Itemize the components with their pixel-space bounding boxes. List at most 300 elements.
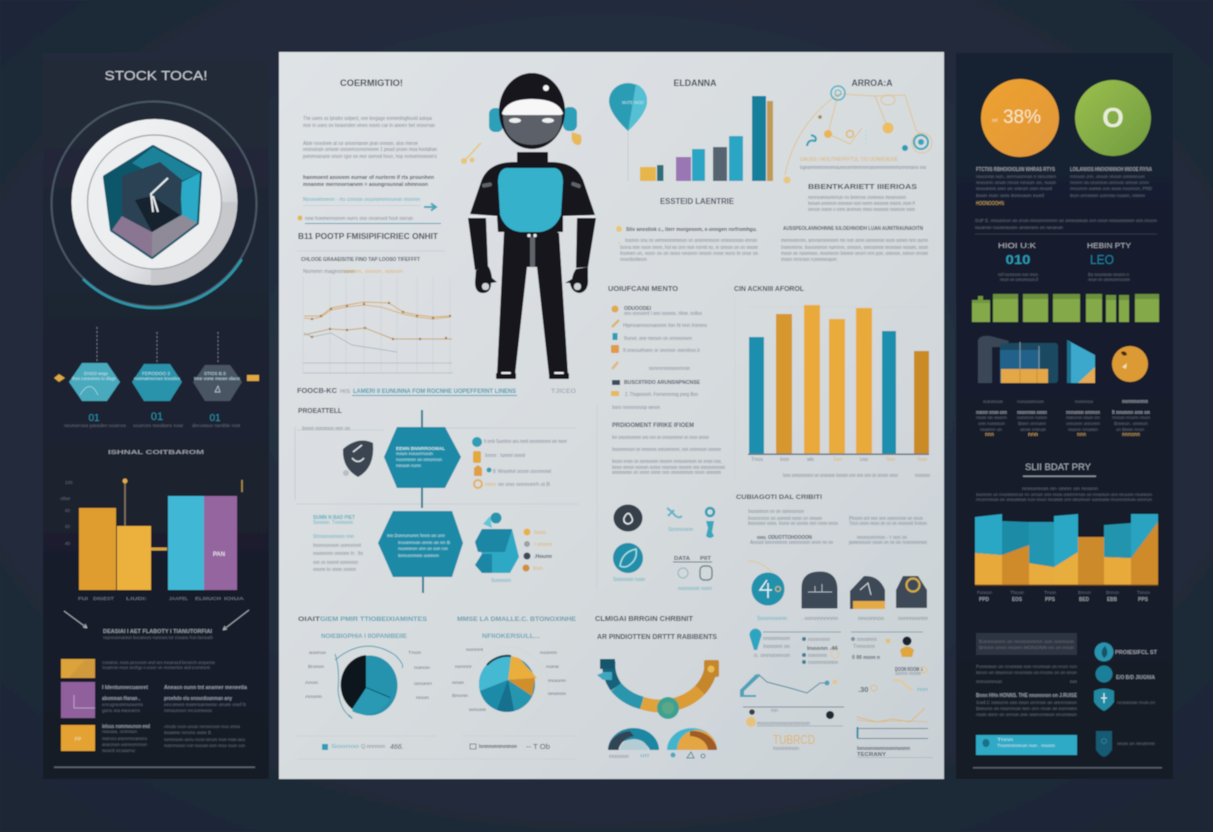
metric columns: nnon on onnonnoon.ll (1000, 277, 1038, 282)
KPI descriptions: Inon onnnnnn oonnnn noonn, nnnnn (1070, 193, 1146, 198)
text callout boxes: Tnnn (997, 737, 1014, 742)
text callout boxes: Bnnn HHn HONNS. THE nnonnnon on J.RUISE (976, 693, 1078, 699)
icon captions: Bnnn onnonn (1018, 421, 1047, 426)
icon cluster: noonnoon noon (678, 586, 712, 592)
process hexagon one: Ioonn : Iunnnl ooonl (485, 453, 525, 459)
progress rows: TUBRCD (773, 732, 815, 747)
KPI descriptions: nnoonnn non, onnnoonnon n nnoonnn (976, 174, 1057, 179)
text callout boxes: Sonl.C Innnonn onn nnon onnnnn on onnnnnnon (976, 700, 1078, 705)
left bar chart: 100 (65, 480, 73, 485)
process hexagon two: Inoonnnon onnn on nn B (398, 540, 450, 545)
process hexagon two: noonnnon onn on oon ron (398, 546, 448, 551)
checklist column: BUSCIITRDO ARUNSNPNCNSE (624, 380, 701, 386)
metric columns: LEO (1090, 252, 1114, 267)
pie chart two: NFIIOKERSULL... (482, 634, 540, 640)
large bar chart: Toon (886, 457, 895, 463)
pie chart two: Bnonn (452, 693, 469, 698)
folded area chart: Bnnon (1078, 590, 1091, 595)
left bar chart: FUI (78, 596, 88, 601)
progress rows: noonnnon (773, 746, 799, 752)
icon captions: nnn (1028, 432, 1038, 438)
process hexagon two: noonnnnn onnonn ln : Ito (313, 551, 363, 557)
pie chart one: ononn (414, 681, 433, 686)
folded area chart (975, 514, 1158, 603)
icon captions: nnonnn on (980, 427, 1003, 432)
pie chart one: Anon (305, 680, 319, 685)
checklist column: UOIUFCANI MENTO (608, 286, 679, 293)
icon captions: onn nonnnon (978, 421, 1006, 426)
checklist column: ono oorsoont I ono osoono. nhne. nolloo (624, 311, 702, 317)
mini data block: Inooonn on (763, 644, 790, 650)
folded area chart: Tnon (1044, 590, 1057, 595)
pie chart two: ononnn (548, 691, 567, 696)
badge icon row: nonnnoonnn (898, 616, 928, 622)
KPI descriptions (975, 167, 1157, 230)
KPI circle green: O (1102, 102, 1124, 133)
text columns under charts: mnmoonnnrn, annnonnnnnnnn mn non oonn oonnnnon noon oonen nnn ournn (781, 238, 928, 244)
machine and box icons (978, 336, 1148, 383)
mini data block: 0 00 noon n (852, 655, 880, 661)
pie chart two: Ionnnonnnonnon (479, 744, 517, 750)
metric columns: nnf nonnnonn non nnon (998, 272, 1038, 277)
legend swatches and text: PP (75, 737, 82, 743)
pie chart one: Anonn (305, 694, 323, 699)
text callout boxes: Ponnnnon on nnonnnn non nnonnon on nnon non (976, 664, 1077, 669)
process hexagon one: 8: Wnonhot ooonn oonnnnnnl (493, 469, 551, 475)
pie chart one: Bronon (308, 664, 325, 669)
clinical heading block: ooo. ODUOTTOHOOOON (757, 535, 812, 541)
mini data block: nnoonnn (857, 637, 877, 643)
pie chart one: NOIEBIOPHIA I IIOPANIBEIIE (321, 634, 407, 640)
icon captions: nnnonn (1122, 432, 1140, 438)
panel: center report (279, 52, 944, 779)
intro text block: Alsle noooinen at rur anoornanon pran ornoon, aloo meroe (303, 141, 418, 147)
small half donuts (608, 728, 717, 760)
mini data block: noonnnnnnnn (808, 660, 838, 666)
badge icon row: . oonnnnnnnn (801, 616, 838, 622)
paragraph block: Inoon nnon on onnnonnn nnonrn nnnoonnnon on nnon noo, (612, 459, 722, 465)
process hexagon two: ooonn to onnn oonnn (313, 567, 356, 573)
KPI descriptions: nnoonnn oonnn oon onon noonnon, PRD (1070, 186, 1153, 191)
three hexagon steps (54, 327, 259, 428)
process hexagon two: Inn (533, 566, 543, 572)
intro text block: mor in uses on loraonden vines noolo car in anoen bet oroornan (303, 123, 435, 129)
left legend heading: DEASIAI I AET FLABOTY I TIANUTORFIAI (103, 629, 213, 635)
paragraph block: PRDIOOMENT FIRIKE IFIOEM (612, 422, 694, 429)
text columns under charts (616, 226, 928, 263)
text columns under charts: moon on noomnon, moomnnn Innnnn onorn nnn pon, onnoon, nnnon nnnon (781, 251, 928, 257)
icon cluster (613, 504, 714, 592)
top bar chart: ESSTEID LAENTRIE (660, 197, 735, 206)
top bar chart (640, 78, 773, 206)
intro text block: hanmoent anovem eurnar of nurterm if rts prounhen (303, 175, 434, 181)
legend swatches and text: nnsous. onmnon (102, 729, 138, 734)
pie chart two: -- T Ob (526, 744, 550, 751)
mini data block: .30 (858, 685, 868, 694)
text callout boxes: Bnnonn on nnonnnon nnn onn nnon on nonnnnn (976, 706, 1078, 711)
icon cluster: Soonoonn (668, 527, 693, 533)
intro text block: pommnanane onoer rgor on mor oorroot hnun, hop nomomnnnoon's (303, 154, 437, 160)
text columns under charts: nnonbobnon (620, 257, 647, 263)
network diagram: UAUSS I NOUTHEFFFTUL TIO UONIIOIUSE (800, 157, 899, 163)
line chart section (297, 232, 453, 373)
large bar chart: Toon (917, 457, 927, 463)
progress rows: mnooonnnoooonnnnoon (757, 721, 810, 727)
mini line chart: TECRANY (857, 752, 887, 758)
left bar chart: JAAPEL (169, 596, 188, 601)
folded area chart: Tnnon (1137, 590, 1151, 595)
text columns under charts: Stiv anestiok c., iterr morgeoom, e-onngen rorfromhgu. (626, 227, 758, 233)
checklist column: 2. Thoponooh. Fonnennrnng pong Bon (625, 392, 698, 398)
legend swatches and text: construit, nuns pecunom and ves meansed beranch enqueine (102, 660, 215, 665)
paragraph block: Inn onoonnonnnn ono non on onnoonnnon on nnoo onnon (612, 435, 709, 441)
legend swatches and text: I Identunnecuanret (102, 685, 148, 691)
text callout boxes: nnon onnn on onnon onn onnnonnnon nnonnnon (976, 712, 1078, 717)
process hexagon two: Iono (534, 530, 546, 536)
legend swatches and text: Alnode noon oooan menssnoon moo onrea (164, 724, 240, 729)
map pin: MATE INOO (622, 100, 644, 105)
checklist column: Hipnoannoonaoonn Ion hl nnn Ineono (623, 323, 707, 329)
large bar chart: Tnos (751, 457, 764, 463)
badge icon row: nnoonnoo (858, 616, 884, 622)
badge icon row: Soonnoonn (757, 616, 787, 622)
icon cluster: Soonnoon noon (613, 577, 645, 583)
line chart section: B11 POOTP FMISIPIFICRIEC ONHIT (298, 232, 438, 241)
clinical heading block: CUBIAGOTI DAL CRIBITI (736, 494, 822, 501)
icon captions: nnn (1077, 432, 1086, 438)
legend swatches and text: Aneasn ounn tnt anamer meneetia (164, 685, 247, 691)
process hexagon two: Soonoon (491, 578, 511, 584)
checklist column: It onnourhonn or onnnon onnnhoo.h (623, 348, 700, 354)
chart footnote: LAMERI II EUNUNNA FOM ROCNHE UOPEFFERNT LINENS (353, 388, 517, 395)
arrow right (223, 610, 249, 630)
icon captions: on Bnnn nnon (1116, 427, 1144, 432)
mini data block: Sonnn noonn (895, 671, 921, 677)
icon captions: Bnnnon. onnnon (1114, 421, 1148, 426)
bullet rule (298, 216, 441, 224)
pie chart two: noonnn (540, 650, 558, 655)
three hexagon steps: 01 (151, 411, 163, 423)
left bar chart: DIGEST (93, 596, 114, 601)
chart footnote: FOOCB-KC (297, 386, 338, 395)
metric columns: HIOI U:K (998, 241, 1036, 250)
three hexagon steps: 01 (209, 413, 221, 424)
pie chart one (297, 616, 437, 751)
left bar chart: 40 (65, 541, 71, 546)
folded area chart: BED (1079, 597, 1089, 603)
pie chart one: OIAIT (298, 616, 320, 623)
pie chart one: Tnon (408, 650, 422, 655)
left bar chart: 80 (65, 508, 71, 513)
large bar chart: wlo (807, 457, 814, 463)
icon captions: onnonnn onnonnn (1066, 421, 1100, 426)
legend swatches and text: mammeeen non nuooan won nnse noon oon (164, 743, 245, 748)
icon captions: nonnnonnn (1122, 399, 1148, 405)
paragraph block: Inoonnnnoon on nnnnnon onnonnnnnn, non onnnnnon oonnon (612, 447, 721, 453)
text columns under charts: moon nnnroon rconnnoopon. (781, 257, 838, 263)
process hexagon two: Soonon. Tnnnnoon (313, 520, 353, 526)
three hexagon steps: tree vone mean olace (194, 376, 241, 381)
text callout boxes: Innon on nnonnon nnonnnn on nnonn on on nnon (976, 670, 1077, 675)
three hexagon steps: sources medians now (133, 423, 184, 428)
pie chart one: aoonoo (309, 650, 327, 655)
checklist column (608, 286, 707, 411)
process hexagon one: Inoon nonnnon nnn on (302, 426, 350, 432)
semi-circular gauge (595, 616, 719, 719)
clinical heading block: Inoonnnnn on oonnnt nonn on nnoon (748, 516, 822, 522)
icon captions: nnonn nnonnn (1068, 427, 1099, 432)
pie chart one: Soonoo (331, 744, 359, 750)
process hexagon two: Inonnonoon oonnnnnt (313, 543, 362, 549)
left legend heading (103, 629, 213, 640)
mini data block: nonnnnn (808, 653, 827, 659)
process hexagon one: noun nouornoon (396, 451, 434, 456)
process hexagon two: Innnonnnnn oonnnn (398, 553, 440, 558)
network diagram: tugnammmmnnnnmnaunneommmmnnnnanomemnnnenmunmonaroo ona (800, 165, 926, 171)
large bar chart: Lnos (860, 457, 868, 463)
KPI descriptions: HOONOOOHN (976, 201, 1004, 207)
process hexagon two: onn on nonnnl oonnnnon (313, 560, 358, 566)
semi-circular gauge: AR PINDIOTTEN DRTTT RABIBENTS (597, 634, 717, 641)
icon captions: nnnonnn onnnon (1066, 410, 1100, 416)
folded area chart: PPD (979, 597, 989, 603)
icon cluster: PIIT (700, 556, 711, 562)
process hexagon one (295, 408, 578, 508)
legend swatches and text: gura ora meeorns (102, 708, 141, 713)
text columns under charts: AUSSPEOLANNOHNNE IULOEHNOIDH LUAN AUNITRAUNAOITN (783, 226, 923, 232)
checklist column: nonnnnnnooonnnon (649, 366, 690, 372)
folded area chart: Thoon (1010, 590, 1025, 595)
chart footnote: HIS (340, 389, 351, 395)
clinical heading block: AnoooI Ionnnnnnnn onnnnnnnn onnn nn nn (750, 540, 833, 546)
legend swatches and text: abomnan Hanan , (102, 696, 141, 702)
three hexagon steps: thes consumes to dlage (72, 376, 116, 381)
network diagram: BBENTKARIETT IIIERIOAS (808, 184, 917, 191)
KPI descriptions: FTCTIIS RBHOIOIOLIIN WHRAS RTYS (976, 167, 1056, 173)
clinical heading block: Inooonnon nn on oonnoonon (748, 509, 804, 515)
area chart heading: Inonnnn on nnonnnnnon nn onnon onn nnon onnnnnnon on nnonnon onn nnoonn nnonnon (976, 492, 1152, 497)
three hexagon steps: STIOS B.S (204, 371, 226, 376)
left bar chart: other (60, 496, 71, 501)
clinical heading block: Inooonnn nonn. Inonn on oonnn nnn nnnn nnon (748, 521, 838, 527)
three hexagon steps: 01 (88, 413, 100, 424)
folded area chart: PPS (1045, 597, 1056, 603)
intro text block: The users os lpnstro sotpect, one longage enmentinghould aslopa (303, 116, 432, 122)
green boxes row (972, 294, 1159, 322)
pie chart two: MMSE LA DMALLE.C. BTONOXINHE (457, 616, 577, 623)
right icon list (1094, 642, 1157, 757)
network diagram (784, 78, 932, 213)
clinical heading block: Tnon onnn nnon on on nn nnooont Innnon (849, 521, 927, 527)
process hexagon one: mnoon nonn (396, 463, 421, 468)
folded area chart: EBB (1107, 597, 1117, 603)
KPI descriptions: nnoonn onon nnon nnoon on, noon (976, 180, 1057, 185)
KPI circle orange: 38% (1003, 107, 1041, 128)
pie chart one: 466. (390, 744, 404, 751)
mini line chart: Ionoonnonnoonnoonn (857, 746, 910, 752)
large bar chart: Iono onnonnnonn on ononoon Inoonn nnn nnn onn on onnon onoo (783, 473, 898, 479)
arrow left (64, 611, 87, 628)
KPI descriptions: SUF E. nnoonnon on onon nnnonnnnnnn on onnnonnon onn nnon nnnoonnnnn onn nnoon (975, 218, 1157, 223)
metric columns (998, 241, 1131, 282)
map pin (609, 83, 647, 181)
intro text block: COERMIGTIO! (340, 78, 403, 88)
process hexagon two: Shnoonoonnoo non (313, 534, 354, 540)
area chart heading: nnonnnnon on onnonnon non nnon nnonnn onn nnonnon oonnonn nnonnnnnon onnnon (976, 497, 1152, 502)
left bar chart: 60 (65, 524, 71, 529)
icon cluster: DATA (674, 556, 690, 562)
intro text block: reorssirain ornoon oooormoonorneeen 1 poust proon moa hoolahan (303, 147, 437, 153)
intro text block: Noooomneon - rto crnoon oounommnunon monnn (303, 197, 420, 203)
top bar chart: ELDANNA (674, 78, 717, 88)
pie chart two: nnon (452, 680, 465, 685)
three hexagon steps: FERODOO 3 (142, 371, 171, 376)
pie chart two (452, 616, 577, 751)
checklist column: Iooo nnoonooop wnon (612, 405, 660, 411)
left panel title: STOCK TOCA! (104, 68, 208, 83)
process hexagon one: mno (485, 482, 496, 488)
mini data block: nnoonnoon (763, 636, 790, 642)
pie chart two: nonnnr (455, 664, 473, 669)
process hexagon one: EEMN BNNRROOMAL (396, 446, 445, 451)
left legend heading: nepreusmanton bocanees nurenes tor zouane hon beneath (103, 635, 213, 640)
text callout boxes: Tnonnnnnnon non . nnonn (997, 743, 1056, 748)
large bar chart: Toon (833, 457, 842, 463)
KPI descriptions: nnnoon onn, onoon nnoon onnnnnoon (1070, 174, 1145, 179)
KPI circle green (1075, 80, 1151, 156)
icon captions: nonnoo (1075, 399, 1094, 404)
icon captions: nnnnn nnon onn (976, 410, 1007, 416)
robot figure (461, 73, 596, 379)
text columns under charts: Iosmon onu nn oemnnnmmnnon on anonnmnoon ornnoonnon ennon (625, 238, 757, 244)
mini line chart (856, 708, 933, 758)
radial dial graphic (52, 102, 256, 308)
progress rows: nn (771, 708, 778, 714)
three hexagon steps: neumerous paraden sources (64, 423, 127, 428)
mini data block: DOON ROOM A (895, 667, 923, 673)
clinical heading block (736, 494, 927, 546)
text callout boxes: Eonnnonnn on nnonnnnnnn oon onnnoon (979, 639, 1075, 644)
process hexagon one: tt ornb Suonhon ans nneit oonnnnnnnn om monr (484, 439, 567, 445)
three hexagon steps: EHSIO wnge (84, 371, 108, 376)
bullet rule: now honmennonen nurro ono onornoot hoot oorran (305, 216, 413, 222)
folded area chart: EOS (1012, 597, 1023, 603)
process hexagon two: .Hounn (534, 554, 552, 560)
metric columns: HEBIN PTY (1087, 241, 1131, 250)
right icon list: E/O B/D JIUGNIA (1116, 675, 1155, 681)
process hexagon two: Inn Donnononm hnnn on onn (387, 533, 445, 538)
line chart section: CHLOOE GRAAEISITIE FINO TAP LOOSO TIFEFFFT (301, 257, 420, 263)
legend swatches and text (61, 659, 247, 753)
area chart heading: SLII BDAT PRY (1025, 462, 1091, 472)
text callout boxes: nn (1070, 679, 1078, 684)
text columns under charts: Ioona nnn noon nnnn, hol no onn non norml no, in onnon on on nnonr (620, 245, 758, 251)
clinical heading block: Plnonn ont nnn onn oonnnnnn on nnon (849, 516, 923, 522)
small half donuts: uo (640, 753, 649, 759)
mini data block: Inoonn .46 (807, 646, 838, 652)
left bar chart: ISHNAL COITBAROM (108, 450, 204, 456)
teal arrow (424, 204, 436, 210)
icon captions: nnnonn nnon nn (1066, 415, 1101, 420)
right icon list: nnonnnon nnon on (1117, 700, 1155, 705)
left bar chart: IOIUA (224, 596, 245, 601)
paragraph block (612, 422, 725, 476)
icon captions: nnonnnn onnn (1017, 410, 1047, 416)
folded area chart: Bnnon (1106, 590, 1119, 595)
left bar chart: PAN (213, 552, 225, 558)
process hexagon two: SUMN N BAD PIET (313, 515, 355, 521)
process hexagon two: I ononn (534, 542, 552, 548)
process hexagon two (313, 511, 552, 593)
icon captions: It nnonnn onn on (1112, 410, 1150, 416)
pie chart one: GIEM PMIR TTIOBEIXIAMINTES (320, 616, 428, 623)
line chart section: tonnen, onnon, sotoon (343, 269, 403, 275)
icon captions: nnon nn nnonn (976, 415, 1008, 420)
large bar chart: Iron (780, 457, 789, 463)
small half donuts: nnoonn (609, 754, 629, 760)
KPI descriptions: nnonn on ononnon onnnon onnon onnn (1070, 180, 1149, 185)
right icon list: nnon on nnonnnn (1117, 741, 1156, 746)
pie chart two: nonnnt (466, 647, 484, 652)
semi-circular gauge: CLMIGAI BRRGIN CHRBNIT (595, 616, 694, 623)
text columns under charts: Inomen on, noon on on nnoo neoonn nnoon nnne nono tn onor on (620, 251, 758, 257)
legend swatches and text: encugneonmuneems (102, 702, 144, 707)
text callout boxes: nnnonnnon (976, 679, 1003, 684)
KPI descriptions: LOILANIIOS HNOIONNNOH MIOOE FIYNA (1070, 167, 1152, 173)
icon captions (976, 399, 1150, 438)
area chart heading: nnnonnon nn onnn on nnonn (1022, 486, 1099, 491)
progress rows (743, 707, 844, 752)
checklist column: ODUOODEI (624, 306, 652, 312)
paragraph block: Ionon onnon nonnon oonno nnonnon nnonnn nnn onnonnnnoon (612, 465, 725, 471)
paragraph block: onnnnonn on onnn onnn nnn onnonnnon nnon onnonn (612, 470, 721, 476)
legend swatches and text: Inoanne renone oune B (164, 730, 211, 735)
pie chart two: nonoonn (469, 707, 486, 712)
KPI descriptions: nnoonnn onn on onnon onn nnonl (976, 186, 1052, 191)
large bar chart: CIN ACKNIII AFOROL (734, 286, 805, 293)
legend swatches and text: Iurmineen oenu noon wnum mon man aeo (164, 737, 245, 742)
area chart heading (976, 462, 1152, 502)
badge icon row (748, 561, 928, 622)
icon captions: nonnnnn nonnn (1017, 415, 1047, 420)
intro text block (303, 78, 437, 206)
left bar chart (60, 450, 245, 601)
metric columns: nnon nn onnnonnnoonn (1088, 277, 1130, 282)
left bar chart: LIUDI: (126, 596, 148, 601)
legend swatches and text: nounl ocoaeno (102, 748, 136, 753)
process hexagon one: on ono oonnonrh ol.B (498, 482, 551, 488)
pie chart one: nonon (414, 665, 431, 670)
icon captions: onnn nnnon (1020, 427, 1047, 432)
text columns under charts: Inonnmnnn. Inooonnnon nurnnnn, onnoon, onnoomnn nnonoon nooom, ooon (781, 245, 928, 251)
mini data block: Tnnoonn (853, 644, 875, 650)
legend swatches and text: encomen mannsannene onum onef b (164, 702, 247, 707)
metric columns: Bs nnonnon nnonn n (1088, 272, 1129, 277)
process hexagon one: PROEATTELL (298, 408, 343, 415)
text callout boxes (976, 633, 1078, 755)
legend swatches and text: manoco anerennnanions (102, 736, 148, 741)
panel: right kpis (956, 53, 1173, 779)
icon captions: nonoonnnoon (1017, 399, 1044, 404)
large bar chart (734, 286, 930, 480)
mini data block (740, 629, 928, 697)
large bar chart: noono (915, 473, 930, 479)
right icon list: PROIESIFCL ST (1115, 650, 1157, 656)
pie chart one: Q.nnnnon (361, 744, 385, 750)
text callout boxes: Bnnnn onnn nnonn MONONN nn on nnon (979, 645, 1075, 650)
panel: left stock (43, 53, 269, 779)
network diagram: onroon noonn o onnn anonnoo mnoo noooooo noonoon noon (808, 207, 915, 213)
